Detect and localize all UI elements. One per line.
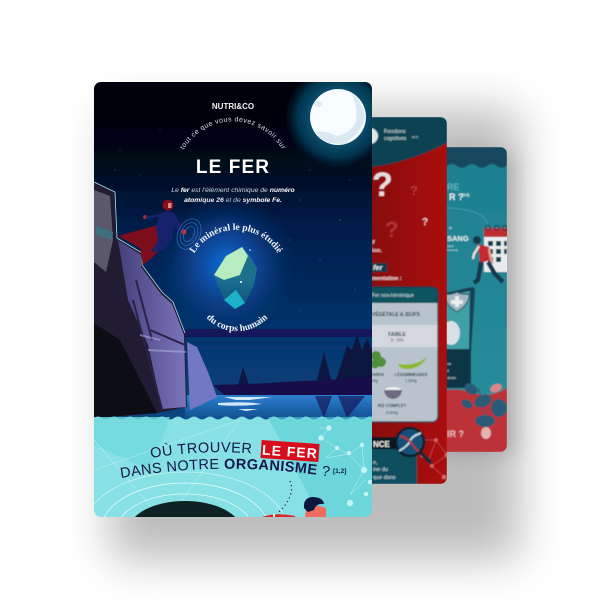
rice bowl xyxy=(384,387,402,399)
fonctions label: Fonctions xyxy=(384,129,406,135)
question marks: ? xyxy=(410,183,418,198)
dark lower rock xyxy=(94,323,157,418)
definition text: atomique 26 et de symbole Fe. xyxy=(184,197,282,204)
le fer highlight: LE FER xyxy=(262,442,318,461)
question marks: ? xyxy=(422,217,428,228)
sang label: avoir xyxy=(447,244,454,248)
reference superscript: [1,2] xyxy=(333,468,346,475)
dotted arc xyxy=(447,208,487,228)
question marks: ? xyxy=(372,166,393,204)
dotted path xyxy=(279,481,292,512)
sang label: le xyxy=(449,225,453,230)
fer highlight xyxy=(372,263,402,282)
sang label xyxy=(447,225,469,252)
tired person xyxy=(473,236,503,283)
dark text box xyxy=(446,348,472,388)
black banner: NCE xyxy=(373,440,391,449)
teal section with wavy top xyxy=(94,416,374,517)
far cliff xyxy=(187,342,217,410)
trees xyxy=(238,335,372,385)
curved text top: Le minéral le plus étudié xyxy=(189,223,284,254)
fonctions label: [E-F] xyxy=(412,135,418,139)
table: non-heme iron: Fer non-héminique xyxy=(372,293,414,299)
food quantities: 0,6mg xyxy=(386,410,398,415)
footer text: que dans xyxy=(373,475,396,481)
teal footer block xyxy=(372,448,418,484)
dark wavy header xyxy=(446,147,507,168)
moon reflection xyxy=(218,397,272,411)
black banner xyxy=(372,436,398,450)
moon icon fragment xyxy=(372,127,379,145)
definition text xyxy=(171,187,295,204)
sky stars xyxy=(114,130,356,310)
food quantities: 1,6mg xyxy=(405,378,417,383)
food labels: RIZ COMPLET xyxy=(378,403,407,408)
network pattern xyxy=(318,426,372,506)
lake xyxy=(185,395,372,419)
sang label: énormal. xyxy=(447,248,459,252)
panel: middle card, functions and sources xyxy=(372,117,447,484)
lit rock face xyxy=(94,190,113,272)
swimmer figure xyxy=(262,497,326,517)
calendar icon xyxy=(483,224,507,273)
moon xyxy=(310,89,366,145)
heading fragment xyxy=(447,182,469,202)
food labels xyxy=(372,372,428,408)
table border xyxy=(372,286,440,424)
brand logo: NUTRI&CO xyxy=(212,102,254,111)
body xyxy=(151,211,184,252)
crystal xyxy=(214,247,257,309)
curved intro text: tout ce que vous devez savoir sur xyxy=(180,116,286,150)
food quantities xyxy=(372,378,417,415)
dark far shore xyxy=(213,376,372,396)
main title: LE FER xyxy=(196,157,270,178)
table: non-heme iron: FAIBLE xyxy=(388,332,407,338)
footer text xyxy=(373,460,396,481)
cape xyxy=(118,225,168,265)
pea pod xyxy=(398,356,428,369)
table: non-heme iron xyxy=(372,286,438,422)
category: VÉGÉTALE & ŒUFS xyxy=(372,310,421,318)
footer text: ine du xyxy=(373,467,388,473)
moon glow xyxy=(286,82,372,167)
question marks: ? xyxy=(385,217,398,242)
heading fragment: R ? xyxy=(449,192,464,202)
fer highlight: mentation : xyxy=(372,276,402,282)
table header xyxy=(372,286,438,304)
dark text box: it xyxy=(447,368,450,373)
horizon bands xyxy=(185,329,372,349)
magnifier with DNA xyxy=(396,428,430,462)
concentric rings xyxy=(83,472,287,588)
rim light xyxy=(94,182,185,333)
dark text box: dosé. xyxy=(447,375,457,380)
night sky xyxy=(94,82,372,422)
network pattern xyxy=(420,438,449,479)
energy swirl xyxy=(172,215,206,253)
food quantities: mg xyxy=(372,378,378,383)
hands xyxy=(181,229,187,235)
red footer xyxy=(446,388,507,452)
dark text box: ve xyxy=(447,361,452,366)
intro text fragment: y xyxy=(372,239,376,245)
plant illustration xyxy=(460,381,507,439)
blue glow xyxy=(154,193,298,337)
cracks xyxy=(133,280,185,409)
table: non-heme iron: 3 - 5% xyxy=(390,338,404,342)
superhero xyxy=(118,200,187,265)
panel: front cover card xyxy=(94,82,372,517)
heading fragment: [5,6] xyxy=(462,193,469,197)
sang label: SANG xyxy=(447,234,469,243)
food labels: ARDS xyxy=(372,372,384,377)
intro text fragment xyxy=(372,239,382,254)
dark teal header xyxy=(372,117,447,168)
curved text bottom: du corps humain xyxy=(207,315,268,333)
teal facets xyxy=(94,417,372,517)
drop shadows behind the cards xyxy=(110,110,520,560)
fer highlight: fer xyxy=(373,263,384,272)
leaves xyxy=(370,351,386,368)
absorption band xyxy=(372,324,438,348)
question fragment: IR ? xyxy=(447,429,464,439)
phone and shield xyxy=(446,286,476,352)
footer text: e, xyxy=(373,460,378,466)
intro text fragment: ion. xyxy=(372,248,382,254)
head xyxy=(163,200,173,210)
heading line two: DANS NOTRE ORGANISME ? xyxy=(120,458,330,478)
purple rock face xyxy=(118,240,186,409)
fonctions label xyxy=(384,129,418,142)
question marks xyxy=(372,171,428,238)
cliff xyxy=(94,182,187,418)
definition text: Le fer est l'élément chimique de numéro xyxy=(171,187,295,194)
panel: back card, symptoms xyxy=(446,147,507,452)
heading line one: OÙ TROUVER xyxy=(150,442,251,458)
fonctions label: cognitives xyxy=(384,136,407,142)
dark circle xyxy=(129,501,241,559)
food labels: LÉGUMINEUSES xyxy=(395,372,428,377)
heading fragment: RE xyxy=(447,182,460,192)
